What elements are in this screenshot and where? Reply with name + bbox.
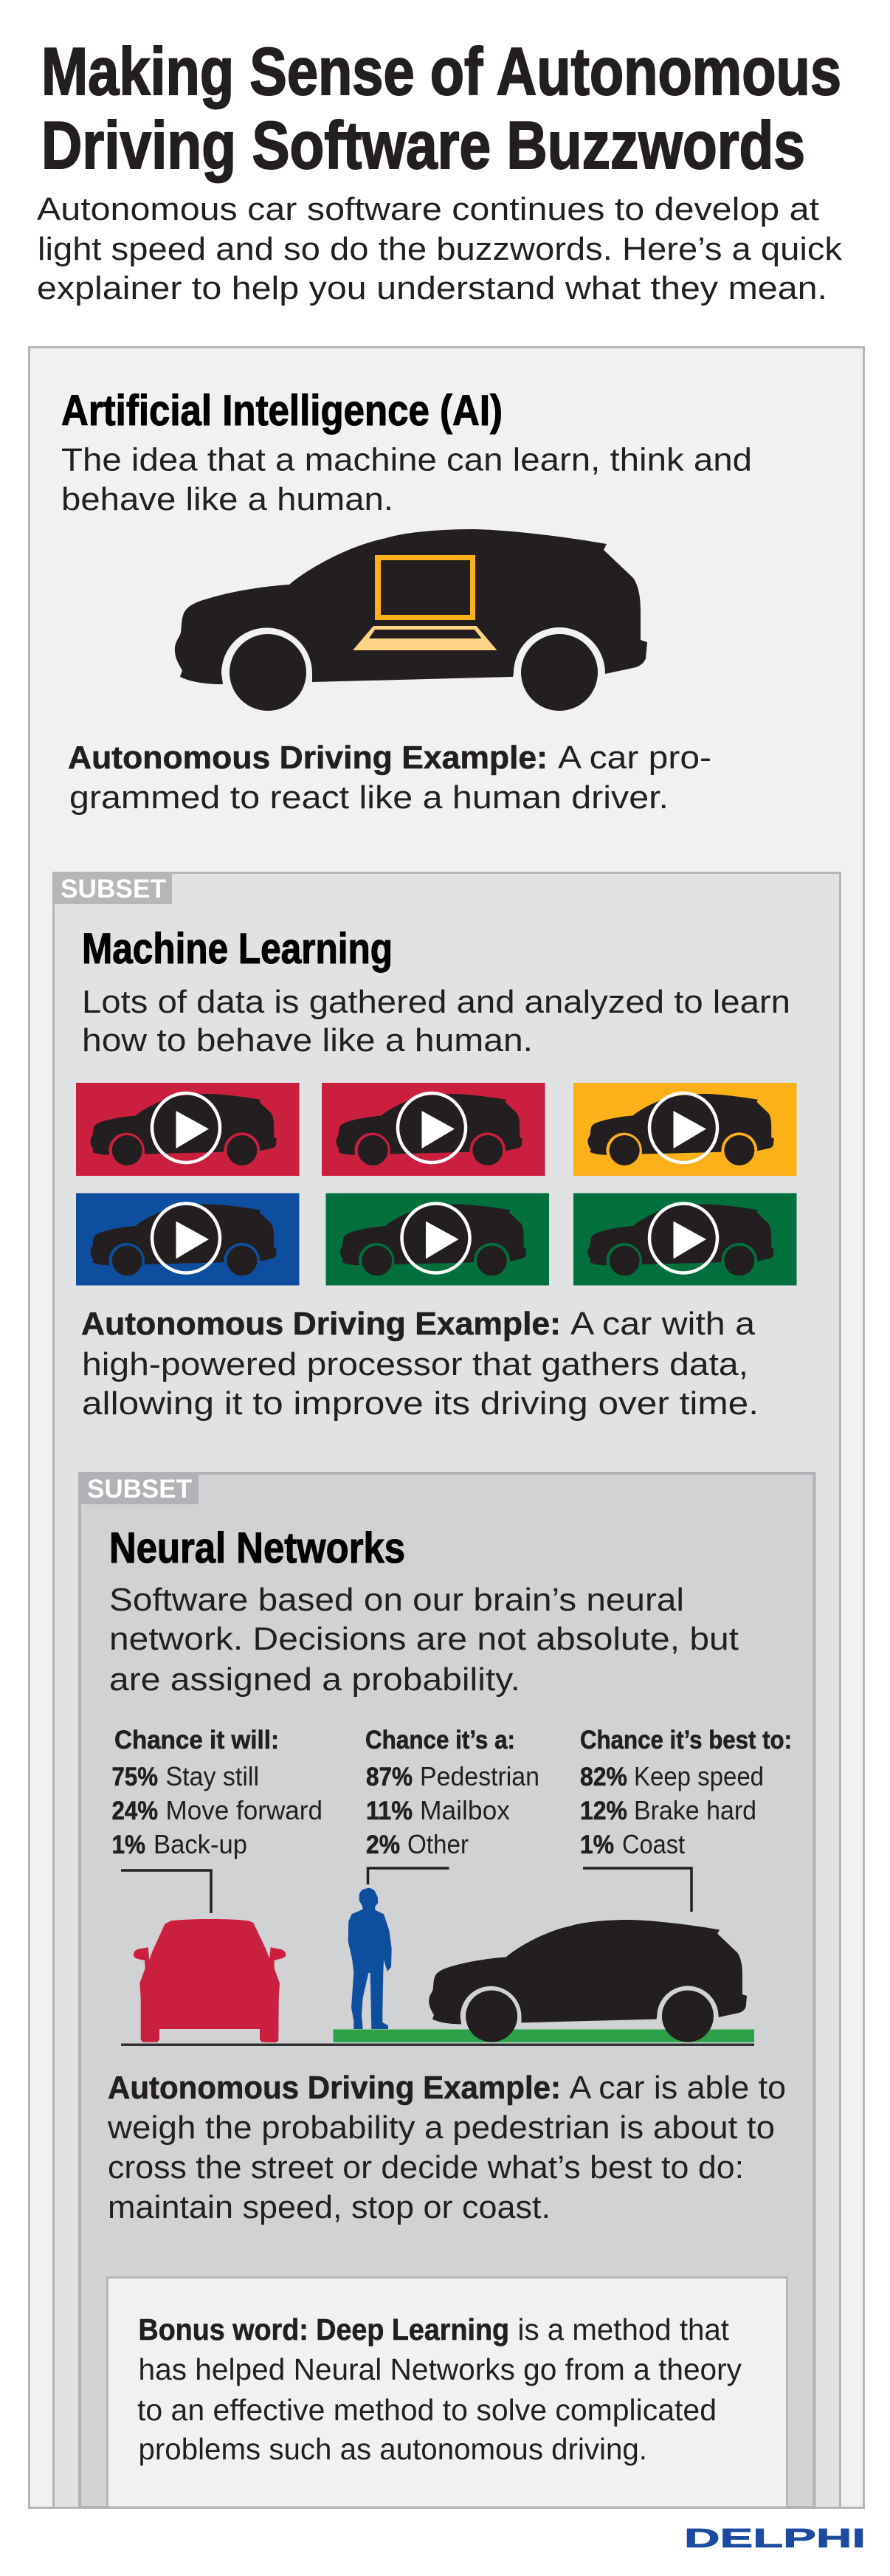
leader line: black car [583, 1868, 691, 1912]
machine learning driving example [81, 1306, 759, 1422]
heading: artificial intelligence: Artificial Intelligence (AI) [61, 387, 503, 435]
icon: car with laptop [175, 529, 647, 711]
logo: Delphi: DELPHI [684, 2523, 866, 2553]
intro text [37, 191, 843, 306]
bonus word text: has helped Neural Networks go from a theory [139, 2352, 742, 2386]
AI driving example: Autonomous Driving Example: [68, 740, 548, 776]
bonus word text: problems such as autonomous driving. [139, 2432, 647, 2466]
machine learning driving example: A car with a [570, 1306, 756, 1342]
AI driving example: grammed to react like a human driver. [69, 779, 669, 816]
title [41, 35, 841, 183]
probabilities: chance it will [112, 1726, 322, 1859]
heading: neural networks: Neural Networks [109, 1524, 405, 1572]
panel: artificial intelligence [30, 347, 863, 2508]
subset tag: SUBSET [87, 1475, 192, 1504]
neural networks definition [109, 1582, 739, 1698]
probabilities: chance it's a: 11% [366, 1797, 413, 1825]
probabilities: chance it's a: Mailbox [420, 1795, 510, 1825]
video tile: blue [76, 1193, 300, 1286]
icon: red car rear view [134, 1919, 286, 2042]
neural networks definition: Software based on our brain’s neural [109, 1582, 684, 1618]
probabilities: chance it will: 1% [112, 1831, 145, 1859]
neural networks driving example: Autonomous Driving Example: [108, 2070, 561, 2106]
leader line: pedestrian [368, 1868, 449, 1884]
bonus word text [137, 2312, 742, 2466]
neural networks definition: are assigned a probability. [109, 1661, 520, 1698]
AI driving example [68, 740, 711, 816]
leader line: red car [121, 1870, 211, 1913]
AI definition [61, 441, 752, 517]
panel: bonus word [108, 2278, 787, 2507]
heading: machine learning: Machine Learning [82, 925, 393, 973]
AI definition: behave like a human. [61, 481, 393, 517]
machine learning driving example: allowing it to improve its driving over time. [82, 1385, 759, 1422]
icon: blue pedestrian [348, 1888, 392, 2029]
intro text: explainer to help you understand what they mean. [37, 270, 827, 306]
road line [121, 2043, 754, 2046]
probabilities: chance it's a: 87% [366, 1763, 413, 1791]
probabilities: chance it's best to: Coast [622, 1829, 685, 1859]
probabilities: chance it's best to: Brake hard [634, 1795, 756, 1825]
probabilities: chance it's a: Other [407, 1829, 469, 1859]
machine learning definition [82, 984, 790, 1058]
probabilities: chance it's a: 2% [366, 1831, 400, 1859]
icon: black car side view [429, 1920, 747, 2042]
icon: green ground [334, 2030, 754, 2042]
bonus word text: is a method that [518, 2312, 730, 2346]
probabilities: chance it's best to: Keep speed [634, 1761, 764, 1791]
video tile: red 1 [76, 1083, 300, 1176]
neural networks driving example: maintain speed, stop or coast. [108, 2189, 551, 2225]
probabilities: chance it's a: Chance it’s a: [365, 1726, 515, 1754]
video tile: red 2 [322, 1083, 545, 1176]
probabilities: chance it will: Move forward [165, 1795, 322, 1825]
machine learning driving example: high-powered processor that gathers data, [82, 1346, 748, 1382]
probabilities: chance it's best to: 12% [580, 1797, 627, 1825]
probabilities: chance it's best to: Chance it’s best to: [580, 1726, 792, 1754]
AI driving example: A car pro- [558, 740, 711, 776]
AI definition: The idea that a machine can learn, think and [61, 441, 752, 478]
bonus word text: to an effective method to solve complicated [137, 2393, 717, 2427]
probabilities: chance it's a [365, 1726, 539, 1859]
neural networks definition: network. Decisions are not absolute, but [109, 1621, 739, 1657]
probabilities: chance it will: Back-up [153, 1829, 247, 1859]
probabilities: chance it's a: Pedestrian [420, 1761, 539, 1791]
probabilities: chance it will: Chance it will: [114, 1726, 279, 1754]
neural networks driving example: cross the street or decide what’s best to do: [108, 2149, 744, 2186]
intro text: light speed and so do the buzzwords. Here’s a quick [38, 231, 843, 267]
neural networks driving example: A car is able to [570, 2070, 786, 2106]
panel: machine learning [52, 872, 840, 2508]
probabilities: chance it's best to [580, 1726, 792, 1859]
intro text: Autonomous car software continues to develop at [37, 191, 819, 227]
subset tag: SUBSET [61, 875, 166, 903]
video tile: green 1 [326, 1193, 549, 1286]
bonus word text: Bonus word: Deep Learning [139, 2312, 509, 2346]
probabilities: chance it's best to: 1% [580, 1831, 614, 1859]
panel: neural networks [78, 1472, 815, 2507]
probabilities: chance it's best to: 82% [580, 1763, 627, 1791]
probabilities: chance it will: Stay still [165, 1761, 259, 1791]
video tile: yellow [573, 1083, 797, 1176]
machine learning definition: Lots of data is gathered and analyzed to learn [82, 984, 790, 1020]
machine learning definition: how to behave like a human. [82, 1022, 533, 1058]
probabilities: chance it will: 24% [112, 1797, 158, 1825]
neural networks driving example [107, 2070, 786, 2225]
video tile: green 2 [573, 1193, 797, 1286]
neural networks driving example: weigh the probability a pedestrian is about to [107, 2110, 775, 2146]
machine learning driving example: Autonomous Driving Example: [81, 1306, 561, 1342]
probabilities: chance it will: 75% [112, 1763, 158, 1791]
